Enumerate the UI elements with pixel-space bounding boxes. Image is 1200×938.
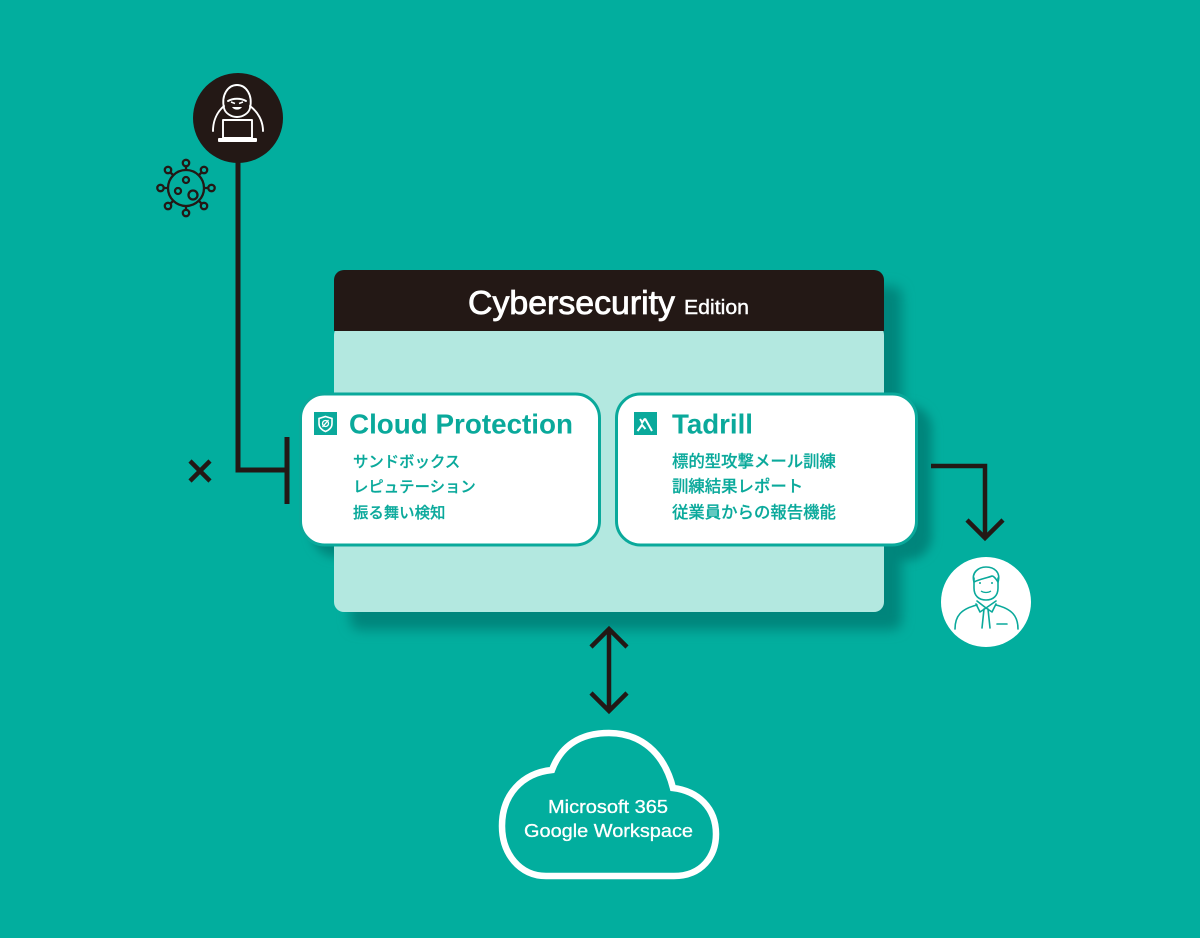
icon: hacker [193, 73, 283, 163]
arrow: bidirectional [591, 629, 627, 711]
cloud: Microsoft 365 / Google Workspace [502, 733, 716, 876]
icon: virus [157, 160, 215, 216]
panel header [334, 270, 884, 331]
panel: Cybersecurity Edition [334, 270, 884, 612]
cloud: Microsoft 365 / Google Workspace: Google Workspace [524, 821, 693, 841]
panel header: Cybersecurity [468, 284, 676, 321]
arrow: attack blocked [238, 160, 287, 504]
icon: shield [314, 412, 337, 435]
list: Tadrill features [672, 453, 837, 522]
list: Tadrill features: 従業員からの報告機能 [672, 504, 836, 522]
list: Tadrill features: 訓練結果レポート [672, 478, 803, 496]
list: Cloud Protection features: レピュテーション [353, 478, 476, 496]
list: Tadrill features: 標的型攻撃メール訓練 [672, 453, 837, 471]
panel header: Edition [684, 297, 749, 319]
icon: mountains [634, 412, 657, 435]
arrow: to user [931, 466, 1003, 538]
panel: Tadrill [616, 394, 916, 545]
cloud: Microsoft 365 / Google Workspace: Microsoft 365 [548, 797, 668, 817]
list: Cloud Protection features [353, 453, 476, 522]
panel: Cloud Protection [300, 394, 600, 545]
panel: Cloud Protection: Cloud Protection [349, 408, 573, 440]
list: Cloud Protection features: 振る舞い検知 [353, 504, 445, 522]
panel: Tadrill: Tadrill [672, 408, 753, 440]
list: Cloud Protection features: サンドボックス [353, 453, 460, 471]
icon: blocked cross [190, 461, 210, 481]
icon: user [941, 557, 1031, 647]
